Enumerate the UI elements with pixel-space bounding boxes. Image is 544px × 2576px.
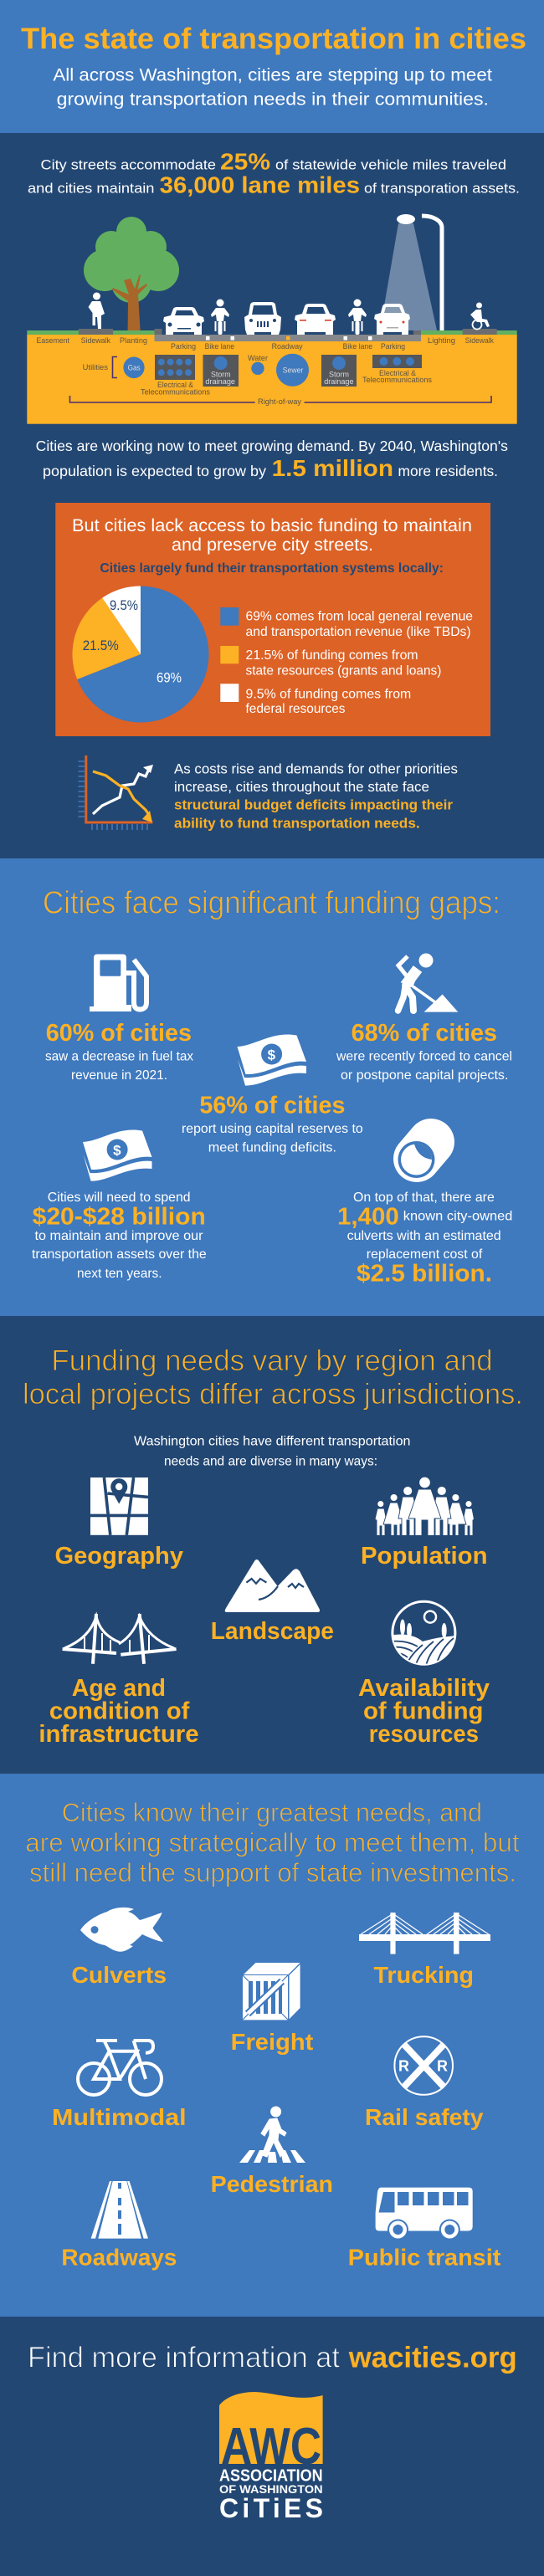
icon: pedestrian on sidewalk [89, 293, 105, 329]
icon: jeep [244, 302, 281, 335]
icon: person on crosswalk [239, 2107, 305, 2163]
logo: Association of Washington Cities: ASSOCIATION [219, 2466, 323, 2486]
intro: diverse cities: Washington cities have different transportation [134, 1434, 410, 1448]
utility: storm drainage right [321, 355, 357, 387]
utility: electrical right [362, 355, 432, 384]
icon: cyclist [211, 300, 229, 335]
statistic: city streets: City streets accommodate [40, 157, 216, 173]
item: geography [55, 1477, 183, 1570]
block: spending need: transportation assets over the [32, 1247, 207, 1262]
icon: map with pin [90, 1477, 148, 1535]
icon: bus [376, 2188, 473, 2241]
item: rail safety: Rail safety [365, 2104, 484, 2130]
logo: Association of Washington Cities: CiTiES [219, 2493, 323, 2523]
icon: bicycle [78, 2041, 162, 2095]
pie chart [72, 586, 208, 723]
text: structural deficits: As costs rise and demands for other priorities [174, 761, 458, 776]
street labels: Lighting [428, 336, 455, 345]
street labels: Utilities [83, 363, 108, 371]
utility: electrical left: Telecommunications [141, 388, 210, 397]
legend: 9.5% of funding comes from [246, 687, 411, 701]
street labels: Sidewalk [81, 336, 110, 345]
item: freight: Freight [231, 2029, 313, 2055]
item: multimodal [52, 2041, 187, 2130]
block: capital reserves: meet funding deficits. [208, 1141, 336, 1155]
item: culverts: Culverts [71, 1962, 167, 1988]
block: fuel tax: saw a decrease in fuel tax [45, 1049, 193, 1064]
legend: federal resources [246, 702, 345, 716]
statistic: population growth [36, 438, 508, 481]
block: fuel tax [45, 954, 193, 1083]
item: roadways [61, 2181, 177, 2271]
item: roadways: Roadways [61, 2244, 177, 2271]
call to action [28, 2341, 517, 2374]
block: culverts: On top of that, there are [353, 1191, 495, 1205]
item: rail safety [365, 2036, 484, 2130]
heading: funding gaps: Cities face significant funding gaps: [43, 885, 500, 920]
item: population: Population [361, 1543, 487, 1570]
utility: electrical left [141, 355, 210, 397]
block: spending need: next ten years. [77, 1267, 162, 1281]
legend: 69% comes from local general revenue [246, 610, 473, 624]
legend: and transportation revenue (like TBDs) [246, 625, 471, 639]
statistic: city streets [28, 149, 520, 198]
call to action: wacities.org [348, 2341, 517, 2374]
street labels [37, 336, 494, 371]
street labels: Sidewalk [465, 336, 494, 345]
item: funding resources: of funding [363, 1698, 484, 1725]
utility: storm drainage left [203, 355, 239, 387]
item: funding resources: resources [369, 1721, 479, 1748]
street labels: Roadway [272, 342, 303, 351]
icon: worker shoveling [398, 954, 458, 1012]
item: pedestrian [211, 2107, 333, 2197]
pie chart: 69% [157, 671, 182, 686]
street labels: Bike lane [343, 342, 372, 351]
statistic: city streets: 36,000 lane miles [160, 172, 360, 198]
street labels: Easement [37, 336, 69, 345]
icon: group of people [375, 1477, 474, 1536]
icon: crossing trend chart [79, 755, 153, 830]
icon: railroad crossing sign: R [437, 2058, 448, 2075]
icon: car front [163, 307, 204, 335]
icon: culvert pipe [398, 1141, 435, 1178]
utility: sewer: Sewer [283, 366, 303, 375]
panel heading: But cities lack access to basic funding to maintain [72, 516, 472, 535]
utility: storm drainage left: drainage [205, 377, 235, 386]
block: culverts: $2.5 billion. [357, 1261, 492, 1288]
block: capital projects: or postpone capital projects. [341, 1068, 508, 1083]
panel: funding sources [55, 503, 490, 736]
item: infrastructure age [38, 1614, 199, 1748]
street labels: Parking [381, 342, 405, 351]
block: spending need: Cities will need to spend [48, 1191, 191, 1205]
heading: cities know their needs: still need the support of state investments. [29, 1857, 516, 1887]
pie chart: 9.5% [110, 598, 138, 613]
logo: Association of Washington Cities: AWC [221, 2418, 321, 2476]
utility: gas: Gas [128, 363, 141, 371]
intro: diverse cities [134, 1434, 410, 1469]
item: public transit: Public transit [348, 2244, 500, 2271]
legend: state resources (grants and loans) [246, 663, 441, 678]
icon: railroad crossing sign: R [398, 2058, 409, 2075]
item: infrastructure age: Age and [72, 1675, 166, 1702]
icon: cyclist 2 [348, 300, 367, 335]
icon: money: $ [268, 1047, 276, 1063]
utility: gas [123, 356, 145, 378]
item: landscape [211, 1559, 334, 1645]
panel subheading: Cities largely fund their transportation systems locally: [100, 561, 444, 576]
intro text: growing transportation needs in their communities. [57, 90, 489, 110]
item: funding resources: Availability [358, 1675, 490, 1702]
statistic: city streets: and cities maintain [28, 181, 154, 197]
block: culverts: 1,400 [337, 1203, 399, 1230]
item: infrastructure age: condition of [49, 1698, 190, 1725]
street labels: Parking [171, 342, 196, 351]
block: fuel tax: revenue in 2021. [71, 1068, 167, 1083]
panel heading [72, 516, 472, 555]
utility: electrical left: Electrical & [157, 381, 194, 389]
street cross-section diagram [27, 214, 517, 424]
logo: Association of Washington Cities [219, 2392, 323, 2523]
icon: car rear [295, 304, 336, 335]
right-of-way bracket: Right-of-way [258, 397, 301, 406]
block: capital reserves: report using capital reserves to [182, 1122, 363, 1136]
block: capital projects [336, 954, 512, 1083]
heading: cities know their needs [25, 1797, 520, 1887]
block: capital projects: were recently forced to cancel [336, 1049, 512, 1064]
icon: crate [243, 1963, 300, 2020]
statistic: population growth: more residents. [398, 463, 498, 479]
legend: 21.5% of funding comes from [246, 648, 418, 663]
intro text: All across Washington, cities are stepping up to meet [53, 66, 492, 85]
panel heading: and preserve city streets. [172, 535, 373, 555]
icon: street light [380, 214, 442, 330]
icon: mountains [225, 1559, 320, 1612]
heading: cities know their needs: are working strategically to meet them, but [25, 1827, 520, 1857]
block: spending need: $20-$28 billion [33, 1203, 206, 1230]
item: culverts [71, 1908, 167, 1988]
icon: money [83, 1129, 152, 1181]
item: trucking: Trucking [373, 1962, 474, 1988]
item: population [361, 1477, 487, 1570]
utility: electrical right: Telecommunications [362, 376, 432, 384]
block: culverts: known city-owned [403, 1210, 512, 1224]
block: fuel tax: 60% of cities [46, 1020, 192, 1047]
utility: storm drainage left: Storm [211, 371, 231, 379]
block: culverts [337, 1141, 512, 1288]
block: spending need: to maintain and improve our [35, 1229, 203, 1243]
intro: diverse cities: needs and are diverse in many ways: [164, 1454, 377, 1469]
text: structural deficits [174, 761, 458, 831]
intro text [53, 66, 492, 110]
legend [220, 607, 473, 716]
heading: funding needs vary [23, 1344, 523, 1411]
icon: tree [84, 217, 179, 330]
utility: sewer [276, 354, 309, 387]
icon: fish [80, 1908, 163, 1952]
text: structural deficits: ability to fund transportation needs. [174, 815, 420, 831]
item: infrastructure age: infrastructure [38, 1721, 199, 1748]
item: freight [231, 1963, 313, 2055]
heading: funding needs vary: Funding needs vary by region and [51, 1344, 493, 1377]
item: pedestrian: Pedestrian [211, 2171, 333, 2197]
item: trucking [359, 1913, 490, 1988]
statistic: population growth: Cities are working now to meet growing demand. By 2040, Washington's [36, 438, 508, 454]
icon: railroad crossing sign [394, 2036, 453, 2095]
item: public transit [348, 2188, 500, 2271]
utility: electrical right: Electrical & [379, 369, 417, 377]
icon: fuel pump [90, 954, 146, 1011]
heading: cities know their needs: Cities know their greatest needs, and [62, 1797, 482, 1827]
item: multimodal: Multimodal [52, 2104, 187, 2130]
item: funding resources [358, 1601, 490, 1748]
statistic: city streets: of statewide vehicle miles traveled [275, 157, 506, 173]
right-of-way bracket [70, 396, 491, 406]
heading: funding needs vary: local projects differ across jurisdictions. [23, 1378, 523, 1411]
text: structural deficits: structural budget deficits impacting their [174, 797, 453, 813]
street labels: Planting [120, 336, 147, 345]
block: capital projects: 68% of cities [352, 1020, 497, 1047]
utility: storm drainage right: Storm [329, 371, 349, 379]
street labels: Bike lane [205, 342, 234, 351]
icon: car rear 2 [374, 304, 410, 335]
icon: farmland [389, 1601, 459, 1669]
item: landscape: Landscape [211, 1618, 334, 1645]
ground [27, 335, 517, 424]
item: geography: Geography [55, 1543, 183, 1570]
logo: Association of Washington Cities: OF WASHINGTON [219, 2482, 323, 2496]
utility: storm drainage right: drainage [324, 377, 353, 386]
call to action: Find more information at [28, 2341, 340, 2374]
statistic: city streets: 25% [220, 149, 270, 175]
text: structural deficits: increase, cities throughout the state face [174, 779, 429, 795]
pie chart: 21.5% [83, 638, 119, 653]
block: culverts: replacement cost of [367, 1247, 483, 1262]
block: culverts: culverts with an estimated [347, 1229, 501, 1243]
statistic: population growth: 1.5 million [272, 455, 393, 481]
block: capital reserves [182, 1034, 363, 1155]
statistic: population growth: population is expected to grow by [43, 463, 266, 479]
icon: road [91, 2181, 148, 2239]
icon: cable bridge [359, 1913, 490, 1954]
title: The state of transportation in cities [21, 23, 526, 55]
icon: broken bridge [63, 1614, 177, 1664]
block: capital reserves: 56% of cities [199, 1093, 345, 1119]
icon: money [238, 1034, 306, 1086]
icon: money: $ [113, 1143, 121, 1158]
statistic: city streets: of transporation assets. [364, 181, 520, 197]
utility: water [248, 354, 268, 375]
utility: water: Water [248, 354, 268, 362]
icon: wheelchair user [470, 303, 490, 330]
block: spending need [32, 1129, 207, 1281]
